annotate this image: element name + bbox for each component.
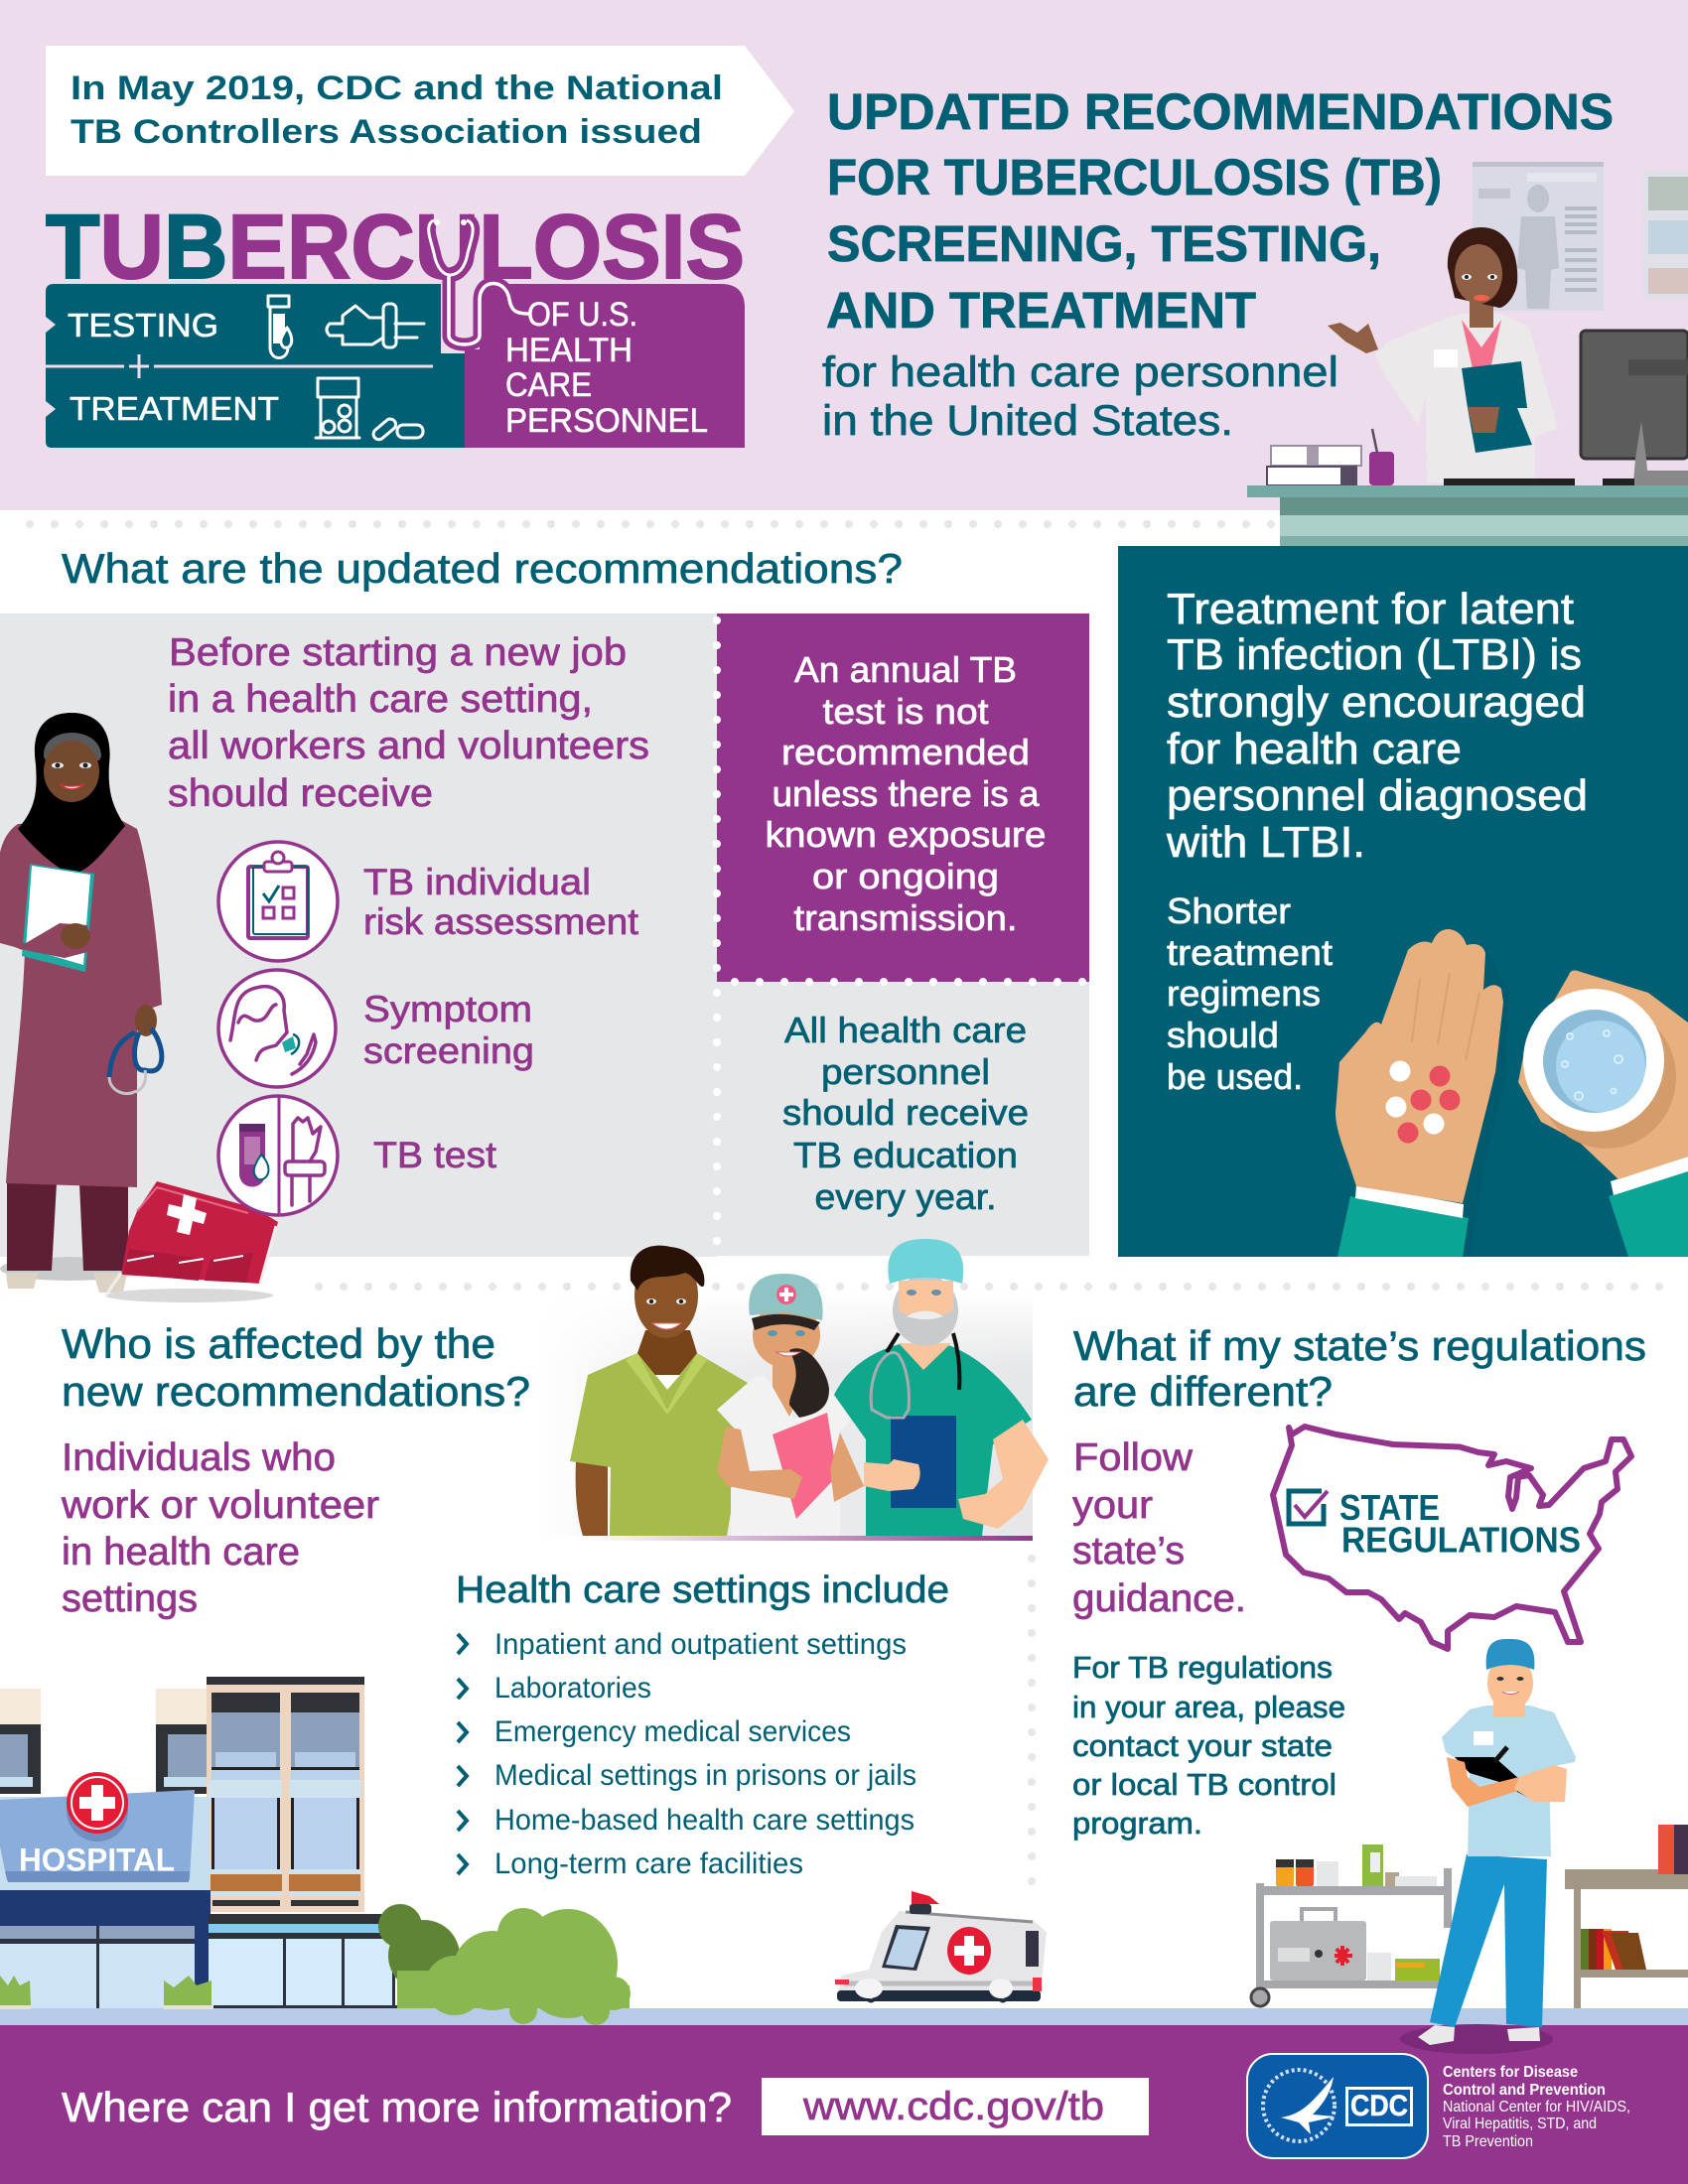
text: follow your state's guidance: state’s <box>1072 1530 1185 1572</box>
logo: tuberculosis testing and treatment: CARE <box>505 366 592 404</box>
callout: issued by banner <box>46 46 794 176</box>
text: where can I get more information: Where can I get more information? <box>62 2084 732 2130</box>
title: updated recommendations: in the United States. <box>822 397 1233 445</box>
illustration: hospital building <box>0 1677 398 2008</box>
text: symptom screening label <box>363 989 534 1071</box>
list: settings: Home-based health care settings <box>494 1804 914 1837</box>
panel: annual TB test: An annual TB <box>794 649 1017 690</box>
illustration: binders and cup <box>1267 429 1394 485</box>
illustration: floor <box>0 2008 1688 2025</box>
illustration: medical cart <box>1251 1844 1452 2006</box>
text: CDC center names: Control and Prevention <box>1443 2082 1606 2099</box>
title: updated recommendations: for health care personnel <box>822 348 1338 396</box>
text: risk assessment label <box>363 862 639 942</box>
text: CDC center names: Centers for Disease <box>1443 2064 1578 2081</box>
link box: cdc website <box>762 2078 1149 2135</box>
icon: pill bottle <box>316 378 359 438</box>
text: CDC center names <box>1443 2064 1630 2150</box>
icon: capsules <box>371 417 423 442</box>
text: risk assessment label: TB individual <box>363 862 591 902</box>
map: state regulations <box>1273 1427 1631 1649</box>
text: LTBI treatment <box>1166 585 1588 867</box>
section: who is affected <box>61 1320 530 1620</box>
text: individuals <box>61 1436 379 1620</box>
text: contact TB control program: or local TB control <box>1072 1767 1336 1802</box>
title: updated recommendations: UPDATED RECOMMENDATIONS <box>827 83 1614 140</box>
panel: TB education every year: TB education <box>793 1135 1018 1175</box>
logo: HHS and CDC: CDC <box>1350 2090 1408 2122</box>
text: symptom screening label: Symptom <box>363 989 532 1029</box>
illustration: health worker with clipboard <box>1400 1639 1576 2054</box>
list: settings: Emergency medical services <box>494 1715 851 1748</box>
text: shorter regimens: treatment <box>1167 932 1333 973</box>
illustration: table with books <box>1565 1825 1688 2008</box>
text: shorter regimens: be used. <box>1167 1056 1303 1097</box>
panel: header band <box>0 0 1688 546</box>
illustration: hand holding water cup <box>1518 971 1688 1257</box>
illustration: receptionist with folder <box>1328 227 1575 485</box>
text: individuals: Individuals who <box>62 1436 336 1479</box>
heading: what are the updated recommendations: What are the updated recommendations? <box>62 545 903 592</box>
text: LTBI treatment: for health care <box>1167 725 1462 773</box>
link box: cdc website: www.cdc.gov/tb <box>802 2085 1104 2128</box>
panel: annual TB test: transmission. <box>794 897 1017 938</box>
logo: tuberculosis testing and treatment: OF U.S. <box>527 296 637 334</box>
list: settings: Long-term care facilities <box>494 1847 803 1880</box>
panel: treatment for latent TB infection <box>1118 546 1688 1257</box>
illustration: health worker in hijab <box>0 713 162 1293</box>
logo: tuberculosis testing and treatment: TESTING <box>68 307 218 343</box>
list: settings: Inpatient and outpatient settings <box>494 1628 907 1661</box>
title: updated recommendations: AND TREATMENT <box>826 282 1256 339</box>
panel: annual TB test <box>717 614 1089 982</box>
heading: what if my state's regulations are different: are different? <box>1073 1368 1333 1415</box>
text: before starting intro: all workers and volunteers <box>168 725 649 767</box>
list: settings: Medical settings in prisons or jails <box>494 1759 916 1792</box>
panel: TB education every year: should receive <box>782 1092 1029 1133</box>
heading: what if my state's regulations are different <box>1073 1322 1646 1415</box>
panel: annual TB test: known exposure <box>765 814 1047 855</box>
text: LTBI treatment: Treatment for latent <box>1167 585 1574 633</box>
text: CDC center names: Viral Hepatitis, STD, and <box>1443 2116 1597 2132</box>
logo: tuberculosis testing and treatment: HEALTH <box>505 332 633 369</box>
icon: symptom screening <box>218 970 336 1087</box>
panel: before starting a new job <box>0 614 717 1302</box>
text: before starting intro <box>168 631 649 815</box>
text: contact TB control program: For TB regulations <box>1072 1650 1333 1685</box>
text: CDC center names: National Center for HIV/AIDS, <box>1443 2099 1630 2116</box>
heading: who is affected <box>62 1320 530 1415</box>
map: state regulations: REGULATIONS <box>1341 1519 1581 1561</box>
text: TB test label: TB test <box>373 1135 497 1175</box>
illustration: hand holding pills <box>1336 929 1509 1257</box>
panel: footer <box>0 2025 1688 2184</box>
logo: HHS and CDC <box>1247 2054 1428 2158</box>
heading: health care settings include: Health care settings include <box>456 1570 949 1611</box>
section: health care settings list <box>456 1570 949 1880</box>
text: CDC center names: TB Prevention <box>1443 2133 1533 2150</box>
text: contact TB control program: program. <box>1072 1806 1202 1841</box>
text: shorter regimens: Shorter <box>1167 890 1291 931</box>
illustration: group of health care workers <box>536 1239 1049 1541</box>
heading: who is affected: Who is affected by the <box>62 1320 495 1367</box>
text: follow your state's guidance: your <box>1072 1484 1153 1527</box>
icon: test tube <box>268 296 292 357</box>
text: LTBI treatment: personnel diagnosed <box>1167 771 1588 820</box>
illustration: bushes and planters <box>0 1904 631 2025</box>
text: contact TB control program <box>1072 1650 1345 1841</box>
title: updated recommendations: SCREENING, TESTING, <box>827 215 1381 272</box>
text: LTBI treatment: TB infection (LTBI) is <box>1167 630 1582 679</box>
figure: man in green scrubs <box>570 1246 748 1536</box>
list: settings <box>458 1628 916 1880</box>
panel: TB education every year: personnel <box>821 1051 990 1092</box>
callout: issued by banner: In May 2019, CDC and the National <box>70 69 723 107</box>
text: LTBI treatment: with LTBI. <box>1166 818 1365 867</box>
panel: annual TB test: recommended <box>781 732 1030 772</box>
illustration: wall poster and shelf <box>1473 162 1688 311</box>
panel: TB education every year <box>717 982 1089 1256</box>
heading: who is affected: new recommendations? <box>62 1368 530 1415</box>
icon: risk assessment checklist <box>218 842 338 961</box>
logo: tuberculosis testing and treatment: PERSONNEL <box>505 402 708 440</box>
panel: annual TB test: unless there is a <box>773 773 1040 814</box>
title: updated recommendations <box>822 83 1614 445</box>
section: state regulations <box>1072 1322 1688 2008</box>
illustration: red medical bag <box>104 1181 278 1302</box>
text: follow your state's guidance: Follow <box>1073 1436 1194 1479</box>
list: settings: Laboratories <box>494 1672 651 1705</box>
text: individuals: settings <box>62 1577 198 1620</box>
text: LTBI treatment: strongly encouraged <box>1167 678 1586 727</box>
illustration: hospital building: HOSPITAL <box>19 1843 175 1878</box>
text: individuals: work or volunteer <box>61 1484 379 1527</box>
figure: nurse with pink folder <box>717 1274 864 1536</box>
panel: annual TB test: or ongoing <box>812 856 999 896</box>
illustration: ambulance <box>835 1891 1047 2001</box>
text: individuals: in health care <box>62 1531 300 1573</box>
text: shorter regimens: should <box>1167 1015 1279 1055</box>
logo: tuberculosis testing and treatment <box>46 197 745 448</box>
text: before starting intro: should receive <box>168 772 433 815</box>
text: contact TB control program: in your area, please <box>1072 1690 1345 1724</box>
map: state regulations: STATE <box>1339 1487 1440 1528</box>
text: contact TB control program: contact your state <box>1072 1728 1333 1763</box>
illustration: reception desk <box>1247 485 1688 546</box>
callout: issued by banner: TB Controllers Association issued <box>70 113 702 151</box>
text: follow your state's guidance: guidance. <box>1072 1577 1246 1620</box>
text: risk assessment label: risk assessment <box>363 901 639 942</box>
text: before starting intro: Before starting a new job <box>169 631 627 674</box>
logo: tuberculosis testing and treatment: TREATMENT <box>70 390 279 427</box>
heading: what if my state's regulations are different: What if my state’s regulations <box>1073 1322 1646 1369</box>
logo: tuberculosis testing and treatment: TUBERCULOSIS <box>46 197 745 298</box>
text: symptom screening label: screening <box>363 1030 534 1071</box>
panel: TB education every year: All health care <box>784 1010 1027 1050</box>
figure: doctor with stethoscope <box>834 1239 1049 1536</box>
icon: TB test tube and arm <box>218 1096 338 1215</box>
text: shorter regimens: regimens <box>1167 973 1321 1014</box>
text: follow your state's guidance <box>1072 1436 1246 1620</box>
text: shorter regimens <box>1167 890 1333 1097</box>
panel: annual TB test: test is not <box>822 691 989 732</box>
icon: arm with skin test <box>327 304 424 347</box>
panel: TB education every year: every year. <box>814 1176 997 1217</box>
illustration: computer monitor <box>1581 331 1688 485</box>
title: updated recommendations: FOR TUBERCULOSIS (TB) <box>827 149 1442 205</box>
text: before starting intro: in a health care setting, <box>168 678 593 721</box>
